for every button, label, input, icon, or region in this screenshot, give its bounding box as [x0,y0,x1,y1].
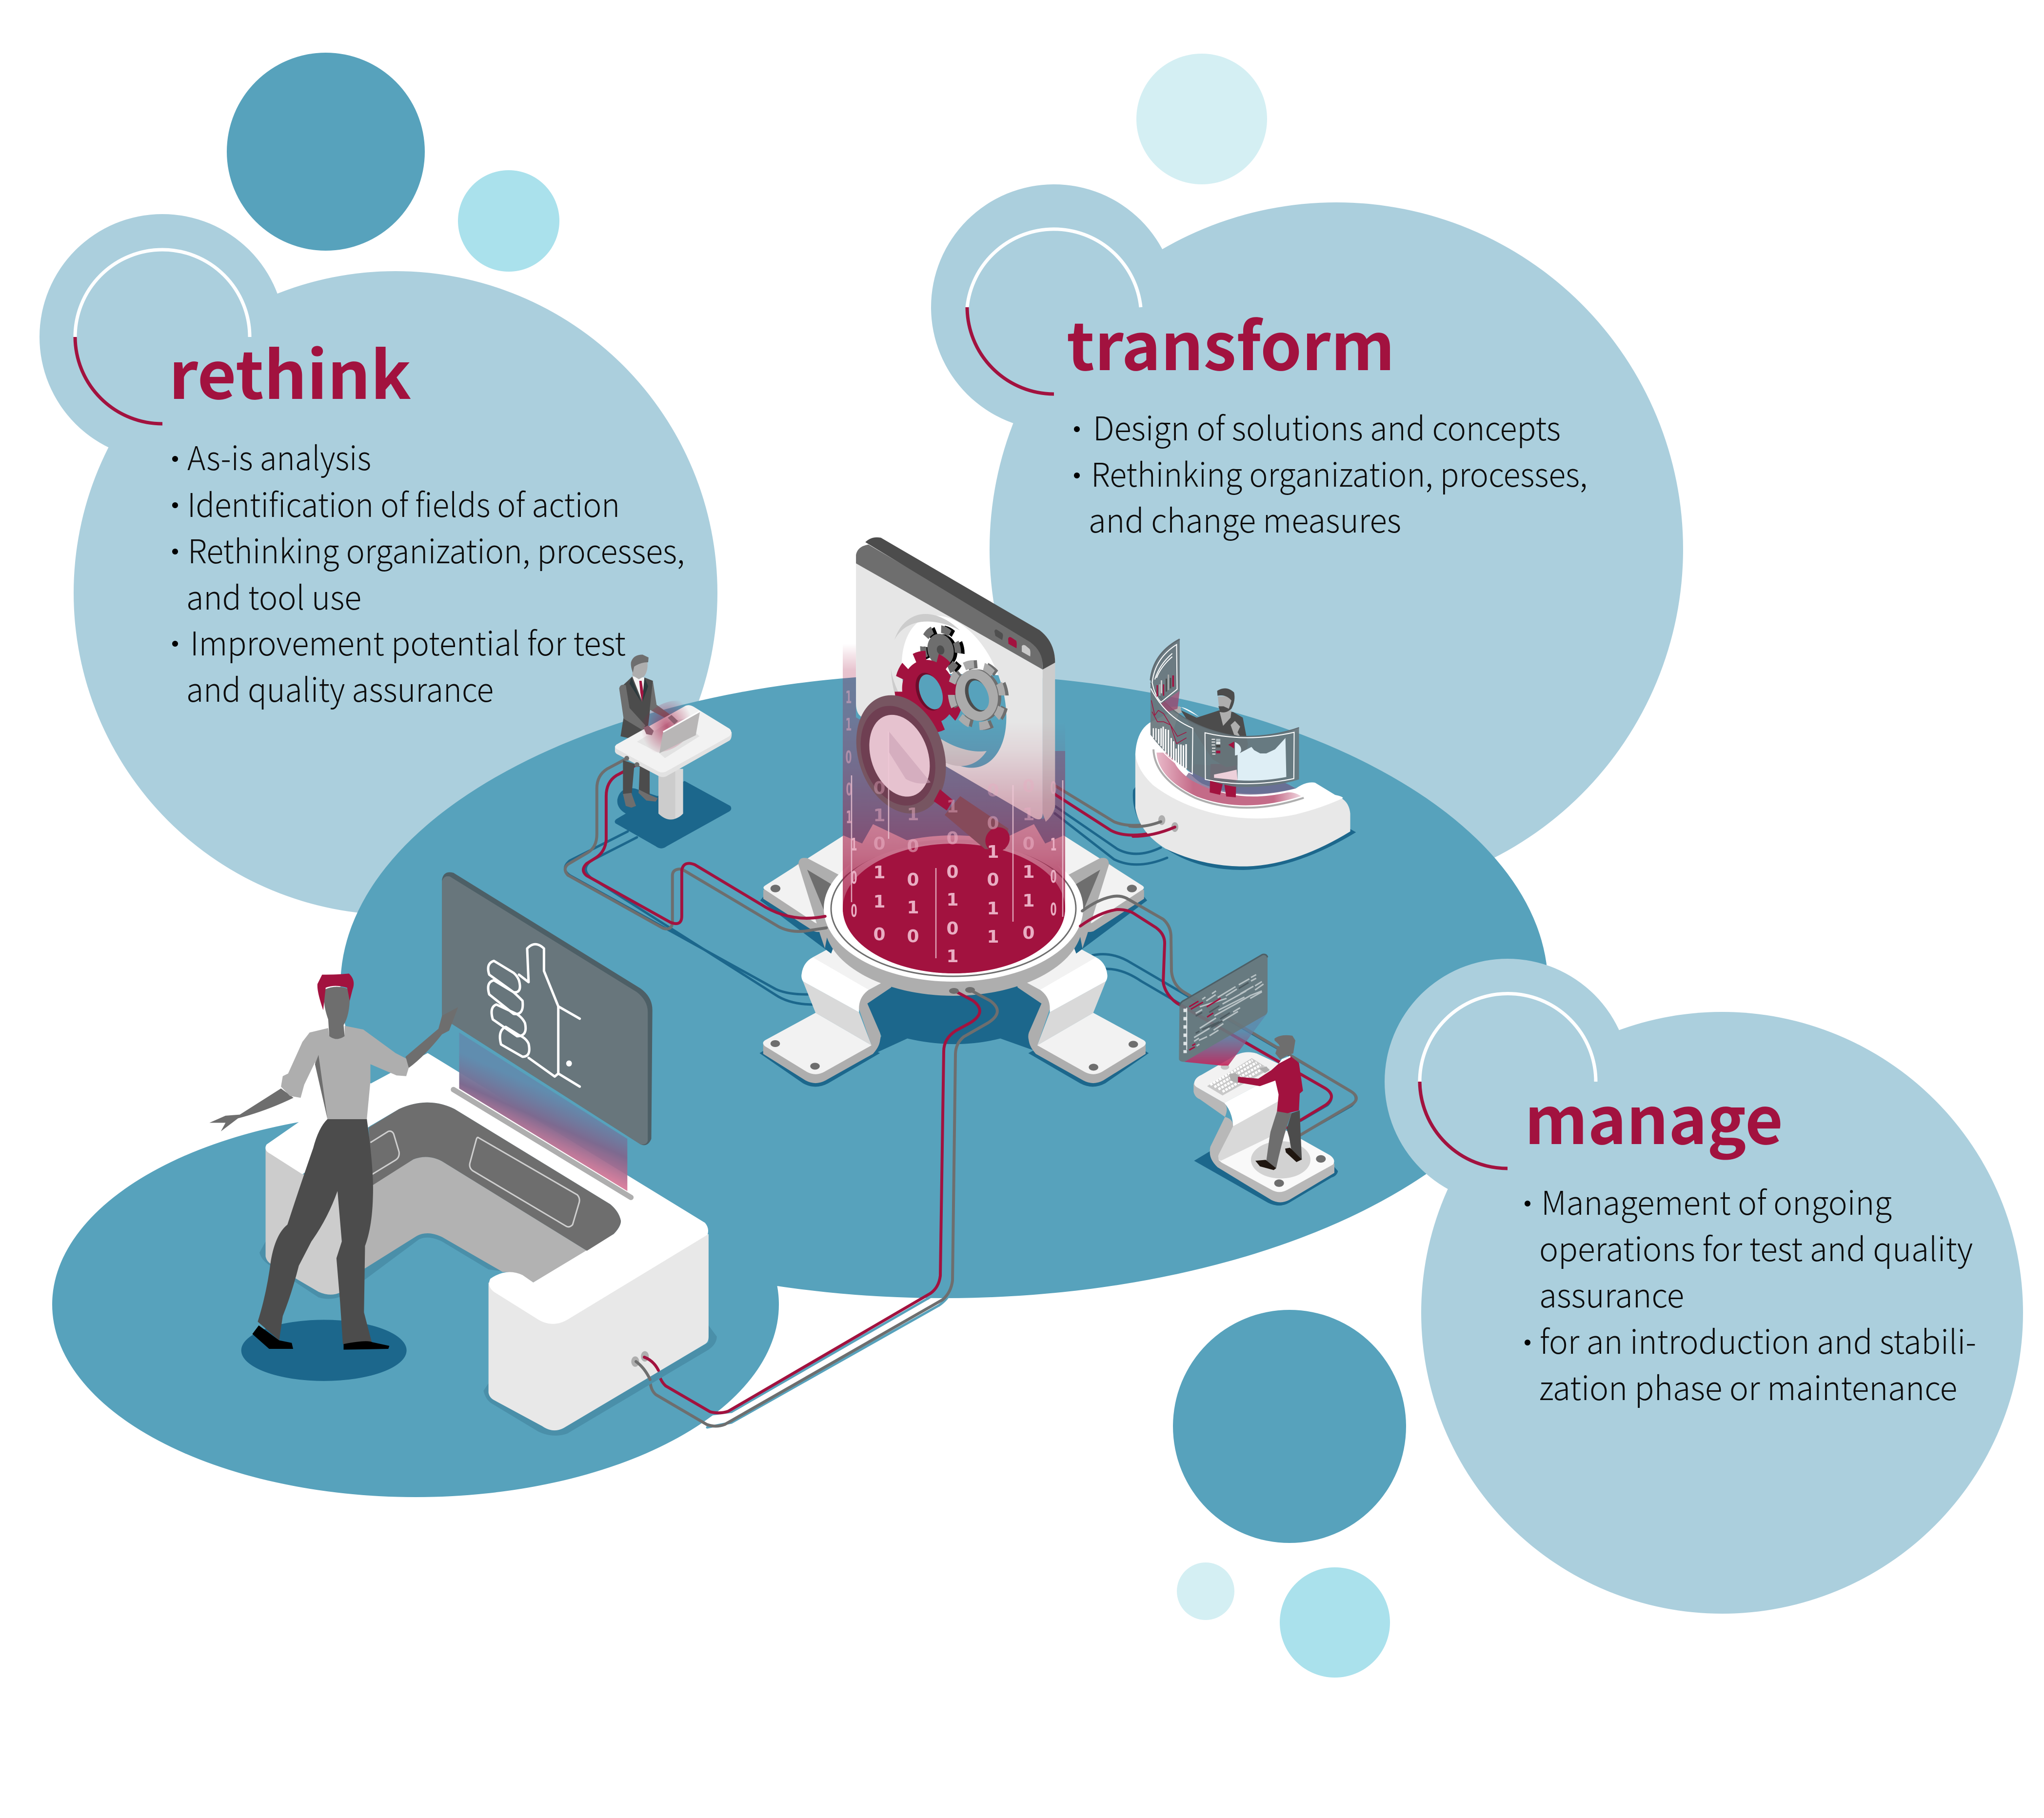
binary digits: 1 [987,899,999,919]
bar chart on upper leaf [1156,674,1174,696]
icon: grey gear [942,653,1014,737]
manage ring accent [1420,993,1596,1168]
text block: rethink list: Identification of fields of action [187,479,620,527]
left rear leg [760,835,887,953]
recess inset outlines [371,1131,579,1227]
right foot [1015,944,1146,1083]
binary digits: 0 [846,748,852,768]
text block: manage list: assurance [1539,1270,1684,1317]
figure pants [258,1119,373,1344]
platform: central teal ellipse [340,674,1548,1298]
tabletop [615,705,731,772]
curved screen band [1151,639,1299,787]
binary digits: 1 [1051,835,1056,855]
pod cable ends [1130,822,1175,836]
binary digits: 0 [987,870,999,890]
figure shirt [281,1026,409,1119]
window side [1043,656,1055,822]
binary digits: 1 [1022,805,1035,825]
binary digits: 0 [907,870,919,890]
text block: manage list [1525,1177,1976,1410]
hair [631,654,649,672]
station: rethink desk with small figure [615,654,732,849]
text block: rethink list: and tool use [186,572,361,619]
area chart [1237,738,1286,781]
hole lip [891,614,987,766]
pie chart [1235,742,1241,755]
bar chart on band [1153,727,1187,769]
text block: rethink list: As-is analysis [187,433,371,480]
heading: rethink: rethink [169,323,411,418]
column edge [1210,1117,1233,1163]
figure hands [1229,1067,1270,1083]
text block: rethink list [172,433,685,711]
front block side [489,1234,709,1430]
pod side [1135,754,1350,867]
desk top [1194,1052,1279,1103]
text block: rethink list: Rethinking organization, processes, [188,526,685,573]
station: rethink console with large figure [209,872,717,1436]
screen frames [1151,645,1294,784]
figure hair [318,973,354,1010]
legend swatches [1211,739,1220,754]
cylinder thin lines [852,731,1063,958]
central machine base, lower legs [759,944,1149,1087]
pod top [1135,707,1343,818]
bolts [771,1040,1138,1070]
binary digits: 0 [946,862,959,882]
binary digits: 0 [873,925,886,945]
text block: manage list: Management of ongoing [1541,1177,1892,1225]
console ports [631,1351,649,1367]
transform ring accent [967,229,1141,394]
binary digits: 1 [1022,862,1035,882]
screen beam [1161,691,1180,712]
panel: manage bubble [1385,959,2023,1614]
binary digits: 0 [1022,834,1035,854]
binary digits: 0 [851,868,857,888]
binary digits: 1 [987,927,999,947]
keyboard [1207,1058,1270,1095]
station: manage desk with figure [1179,954,1338,1205]
binary digits: 0 [1051,778,1056,798]
figure collar [1279,1056,1291,1064]
pod shadow [1133,787,1356,870]
figure legs [623,760,650,795]
panel: transform bubble [931,184,1683,896]
tabletop edge [615,732,732,777]
binary digits: 1 [946,797,959,817]
console recess [369,1103,621,1251]
window face with hole [856,563,1043,819]
text block: transform list: Design of solutions and concepts [1093,403,1561,450]
pod recess gradient [1153,750,1304,808]
left wing side [266,1148,374,1295]
binary digits: 1 [846,688,852,708]
slot [454,1089,631,1197]
icon: crimson gear [888,645,970,739]
binary digits: 0 [987,813,999,833]
icon: dark gear [917,621,968,679]
heading: transform: transform [1067,295,1395,389]
binary digits: 1 [1022,891,1035,911]
thumbs-up screen [442,872,653,1145]
figure right arm [405,1007,458,1068]
base side [1210,1132,1334,1202]
head [632,661,648,679]
icon: magnifier [839,679,1013,856]
recess inner wall [363,1157,587,1283]
rethink ring accent [75,250,250,424]
binary digits: 1 [873,863,886,883]
cables: centre to transform pod [1055,786,1175,835]
binary digits: 0 [1022,776,1035,796]
console shadow: front block [483,1325,717,1436]
column face [1218,1100,1279,1161]
figure left arm [209,1088,294,1131]
figure rear leg [1287,1110,1302,1160]
binary digits: 0 [907,927,919,947]
left foot shadow [759,1019,880,1087]
binary digits: 0 [1051,867,1056,887]
text block: manage list: zation phase or maintenance [1539,1363,1957,1410]
binary digits: 1 [907,898,919,918]
cable ports on desk [624,756,639,767]
platform: lower-left teal ellipse [52,1112,779,1497]
text block: rethink list: Improvement potential for test [190,618,626,665]
code lines [1194,975,1264,1046]
text block: manage list: for an introduction and stabili- [1540,1316,1976,1364]
pod ports [1158,815,1178,832]
cylinder back wall tint [843,644,1065,973]
console cable ends [636,1357,658,1380]
binary digits: 1 [846,715,852,735]
arms [619,681,672,730]
console shadow: left wing [259,1232,503,1299]
desk edge [1193,1083,1227,1117]
binary digits: 1 [851,835,857,855]
floor spot [241,1320,407,1381]
binary digits: 0 [873,778,886,798]
decorative circle: light cyan top [458,170,559,272]
projection beam [1184,1013,1267,1066]
right rear leg [1020,835,1147,953]
code panel [1179,954,1268,1062]
binary digits: 1 [987,842,999,862]
figure shoes [252,1325,389,1350]
teal inside pod [1174,707,1296,794]
binary digits: 1 [873,806,886,826]
figure head and beard [1217,689,1234,713]
beam under screen [459,1032,627,1191]
decorative circle: light cyan bottom [1280,1567,1390,1678]
decorative circle: pale bottom [1177,1562,1234,1620]
jacket [619,676,653,741]
figure neck [1220,711,1231,726]
binary digits: 0 [1022,923,1035,943]
figure hair [1274,1035,1295,1055]
base top [1218,1130,1334,1192]
binary digits: 1 [846,808,853,828]
cables: left desk to centre [565,758,826,931]
desk column [658,769,683,820]
panel: rethink bubble [40,214,717,915]
binary digits: 0 [907,836,919,856]
emitter [1221,1064,1229,1070]
icon: thumbs up [488,944,580,1087]
text block: transform list [1074,403,1588,542]
figure head [1275,1046,1288,1059]
line chart on band [1151,701,1186,744]
decorative circle: pale top [1136,54,1267,184]
binary digits: 0 [851,901,857,921]
cable shadows on platform [565,806,1356,1135]
laptop [631,690,703,763]
transparent data cylinder front tint [843,722,1065,973]
binary digits: 1 [907,805,919,825]
figure shirt fold [315,1055,327,1119]
right foot shadow [1028,1019,1149,1087]
left foot [763,944,894,1083]
figure torso [1181,711,1248,767]
figure hands [1169,706,1240,736]
station: transform pod [1133,639,1356,870]
binary digits: 0 [987,781,999,801]
base shadow [867,968,1042,1055]
figure shoes [623,790,658,808]
cables: centre to manage desk [1080,896,1356,1135]
ramp [1224,1074,1279,1126]
figure legs [1210,764,1237,797]
hands [643,715,678,735]
binary digits: 0 [846,780,853,800]
binary digits: 0 [1051,900,1056,920]
desk shadow [615,781,731,849]
central display: window and gears [856,537,1055,822]
binary digits: 1 [946,890,959,910]
console top [265,1053,708,1324]
text block: transform list: Rethinking organization, processes, [1091,449,1588,496]
figure jacket [1238,1056,1303,1113]
cable ports on base [949,987,975,994]
desk shadow [1194,1150,1338,1205]
heading: manage: manage [1525,1068,1783,1163]
text block: rethink list: and quality assurance [186,664,494,711]
binary digits: 1 [873,892,886,912]
title bar [856,545,1043,670]
figure front leg [1266,1111,1291,1168]
figure head [324,987,350,1039]
central machine rear legs [760,835,1147,953]
round platform [824,824,1083,996]
binary digits: 1 [946,947,959,967]
text block: transform list: and change measures [1089,495,1401,542]
floor circle [1251,1141,1310,1179]
cables: console to centre [636,990,997,1427]
text block: manage list: operations for test and quality [1539,1224,1973,1271]
bolts [1274,1155,1326,1187]
decorative circle: dark teal bottom [1173,1310,1406,1543]
figure shoes [1255,1147,1302,1170]
decorative circle: dark teal top [227,53,425,251]
shirt and tie [630,676,648,702]
binary digits: 0 [946,919,959,939]
binary digits [846,688,1056,967]
binary digits: 0 [946,829,959,849]
binary digits: 0 [873,834,886,854]
window buttons [994,630,1031,656]
